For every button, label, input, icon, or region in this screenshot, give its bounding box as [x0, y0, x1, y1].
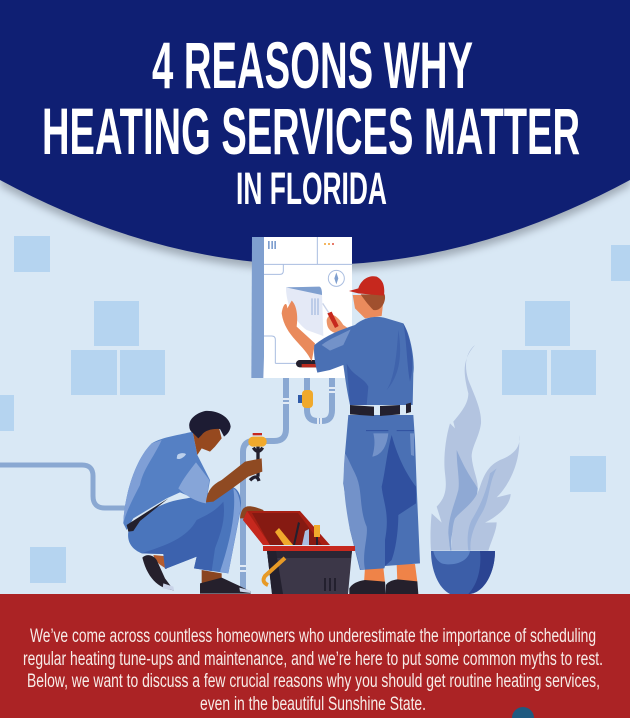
trousers [128, 487, 241, 573]
valve [298, 390, 313, 408]
screwdriver [323, 303, 329, 313]
title: IN FLORIDA [236, 163, 387, 214]
lid [243, 511, 330, 545]
arm [206, 458, 262, 502]
tools [275, 528, 293, 545]
front ankle [202, 570, 222, 583]
header panel [0, 0, 630, 265]
pot [431, 551, 495, 594]
bucket [267, 551, 352, 594]
tap [248, 433, 267, 481]
back ankle [153, 555, 170, 569]
shoes [349, 579, 418, 594]
blue circle peek [512, 707, 534, 718]
trousers [343, 415, 420, 570]
plant [431, 345, 519, 594]
back hand [240, 506, 264, 518]
far hand [327, 315, 351, 333]
shirt [314, 317, 414, 405]
hair [189, 411, 231, 438]
cap [349, 276, 384, 296]
pipes [0, 378, 335, 592]
belt [350, 403, 411, 416]
standing man upper body [282, 276, 414, 416]
background squares [0, 236, 630, 583]
intro text: even in the beautiful Sunshine State. [200, 694, 426, 715]
tall leaf [431, 345, 481, 551]
ankles [364, 564, 417, 583]
handle [264, 558, 285, 585]
crouching man [123, 411, 267, 594]
right leaf [452, 435, 519, 551]
head [353, 295, 384, 318]
near arm [282, 301, 315, 362]
back shoe [142, 555, 174, 590]
intro text [23, 626, 603, 715]
header shadow [0, 0, 630, 271]
title [42, 28, 580, 214]
neck and face [193, 423, 222, 455]
standing man lower body [343, 415, 420, 594]
belt [127, 498, 168, 532]
torso [123, 432, 210, 530]
boiler [251, 237, 352, 378]
rim [263, 546, 355, 551]
toolbox [243, 511, 355, 594]
red band [0, 594, 630, 718]
front shoe [200, 578, 251, 594]
